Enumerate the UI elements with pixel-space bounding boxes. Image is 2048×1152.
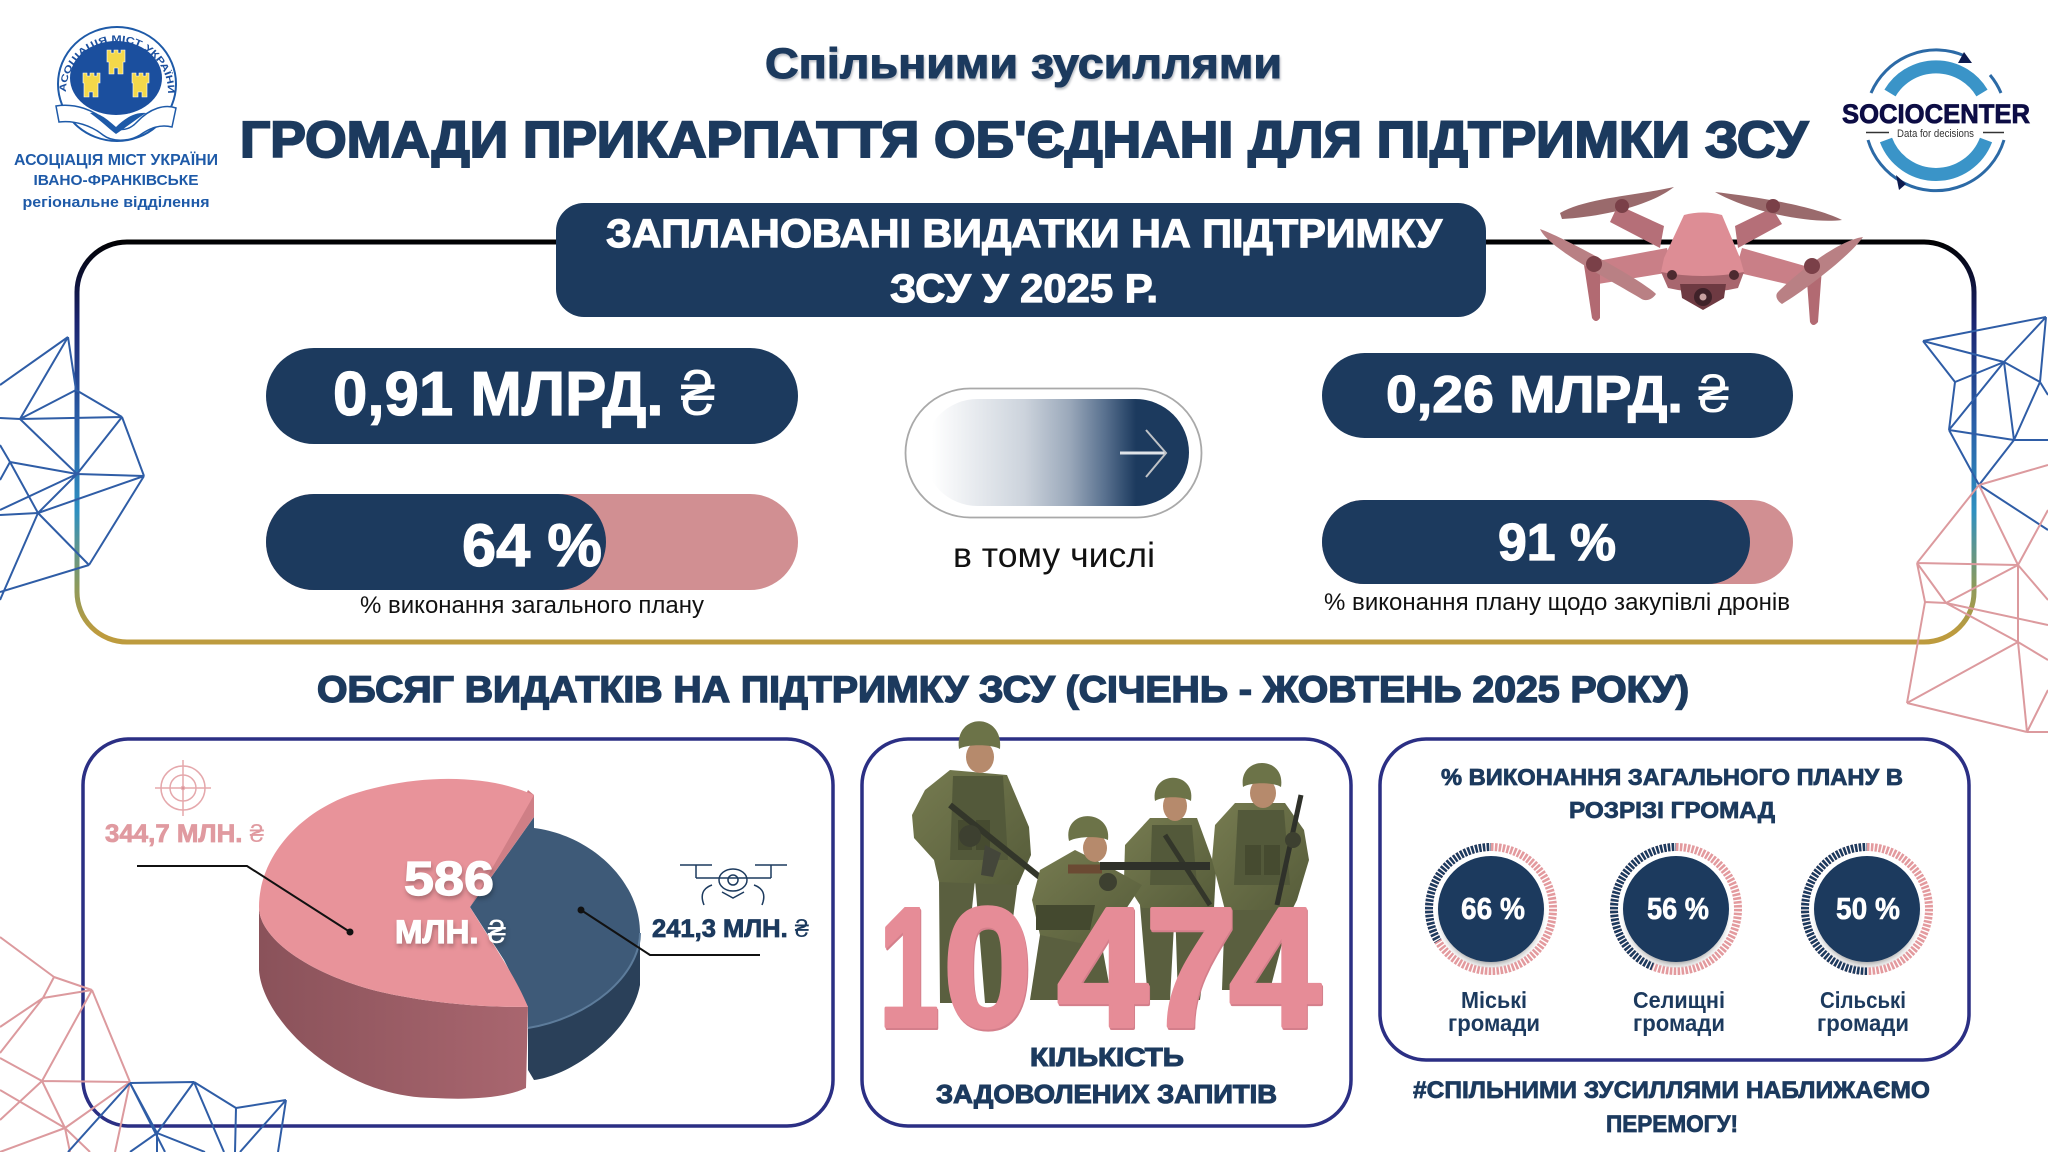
gauge: settlement 56 percent: 56 % (1647, 891, 1709, 926)
decoration: bottom-left pink mesh (0, 937, 130, 1152)
panel: planned expenses frame (77, 242, 1974, 642)
gauge labels: громади (1448, 1010, 1540, 1036)
main title: ГРОМАДИ ПРИКАРПАТТЯ ОБ'ЄДНАНІ ДЛЯ ПІДТРИМКИ ЗСУ (240, 111, 1809, 168)
text: including: в тому числі (953, 536, 1155, 575)
pie chart (259, 779, 640, 1099)
progress bar: 64 percent (266, 494, 798, 590)
big number: 10474 (879, 873, 1321, 1063)
label: drones: 241,3 МЛН. ₴ (652, 915, 809, 943)
caption: number of satisfied requests: КІЛЬКІСТЬ (1030, 1042, 1184, 1072)
big number: 10474: 4 (1229, 873, 1321, 1063)
gauge: urban 66 percent: 66 % (1461, 891, 1525, 926)
big number: 10474: 1 (879, 873, 939, 1063)
stat pill: total amount (266, 348, 798, 444)
closing slogan: ПЕРЕМОГУ! (1606, 1111, 1738, 1138)
gauge labels: Міські (1461, 987, 1527, 1013)
gauge labels (1448, 987, 1909, 1036)
section heading: ОБСЯГ ВИДАТКІВ НА ПІДТРИМКУ ЗСУ (СІЧЕНЬ - ЖОВТЕНЬ 2025 РОКУ) (317, 669, 1689, 710)
logo: Sociocenter (1842, 50, 2030, 191)
decoration: right blue mesh (1923, 317, 2048, 530)
logo caption (14, 152, 218, 211)
soldier 4 (1212, 763, 1309, 990)
gauge: urban 66 percent (1429, 847, 1553, 971)
stat pill: drones amount (1322, 353, 1793, 438)
label: other expenses: 344,7 МЛН. ₴ (105, 820, 264, 848)
illustration: soldiers (912, 721, 1309, 1003)
header: planned expenses: ЗСУ У 2025 Р. (890, 267, 1158, 311)
gauge labels: громади (1633, 1010, 1725, 1036)
progress bar: 64 percent: 64 % (462, 512, 602, 579)
gauge: rural 50 percent: 50 % (1836, 891, 1900, 926)
gauge labels: Сільські (1820, 987, 1906, 1013)
caption: number of satisfied requests: ЗАДОВОЛЕНИХ ЗАПИТІВ (936, 1079, 1277, 1109)
logo: Sociocenter: Data for decisions (1897, 128, 1974, 140)
progress bar: 91 percent (1322, 500, 1793, 584)
decoration: left blue mesh (0, 337, 144, 600)
leader line: other expenses (137, 866, 354, 936)
panel: plan execution by community (1380, 739, 1969, 1060)
closing slogan (1413, 1077, 1930, 1138)
closing slogan: #СПІЛЬНИМИ ЗУСИЛЛЯМИ НАБЛИЖАЄМО (1413, 1077, 1930, 1104)
header: planned expenses: ЗАПЛАНОВАНІ ВИДАТКИ НА ПІДТРИМКУ (606, 212, 1443, 256)
decoration: bottom-left blue mesh (68, 1082, 286, 1152)
progress bar: 91 percent: 91 % (1498, 514, 1616, 572)
pie total value (395, 853, 506, 950)
gauge labels: громади (1817, 1010, 1909, 1036)
logo caption: АСОЦІАЦІЯ МІСТ УКРАЇНИ (14, 152, 218, 169)
header: planned expenses (556, 203, 1486, 317)
subtitle: Спільними зусиллями (765, 40, 1282, 88)
icon: quadcopter (680, 865, 787, 905)
pie total value: 586 (404, 853, 494, 906)
leader line: drones (578, 906, 760, 955)
caption: number of satisfied requests (936, 1042, 1277, 1109)
logo: Sociocenter: SOCIOCENTER (1842, 99, 2030, 129)
caption: drones plan: % виконання плану щодо закупівлі дронів (1324, 589, 1790, 616)
icon: pink drone (1540, 187, 1863, 325)
logo caption: регіональне відділення (22, 194, 209, 211)
icon: target (155, 760, 211, 816)
big number: 10474: 7 (1145, 873, 1237, 1063)
gauge: rural 50 percent (1805, 847, 1929, 971)
gauge: settlement 56 percent (1614, 847, 1738, 971)
decoration: right pink mesh (1907, 465, 2048, 732)
logo: association of Ukrainian cities (55, 26, 177, 142)
pie total value: МЛН. ₴ (395, 914, 506, 950)
soldier 3 (1124, 778, 1216, 1000)
panel: pie chart (83, 739, 833, 1126)
stat pill: total amount: 0,91 МЛРД. ₴ (333, 360, 716, 429)
panel title: % ВИКОНАННЯ ЗАГАЛЬНОГО ПЛАНУ В (1441, 764, 1903, 790)
soldier 2 kneeling (1030, 816, 1210, 1000)
big number: 10474: 4 (1057, 873, 1148, 1063)
panel title (1441, 764, 1903, 823)
panel: satisfied requests (862, 721, 1351, 1126)
soldier 1 (912, 721, 1062, 1003)
gauge labels: Селищні (1633, 987, 1725, 1013)
logo: association of Ukrainian cities: АСОЦІАЦІЯ МІСТ УКРАЇНИ (60, 35, 174, 93)
big number: 10474: 0 (943, 873, 1032, 1063)
stat pill: drones amount: 0,26 МЛРД. ₴ (1386, 366, 1729, 424)
caption: total plan: % виконання загального плану (360, 592, 704, 619)
logo caption: ІВАНО-ФРАНКІВСЬКЕ (34, 172, 198, 189)
panel title: РОЗРІЗІ ГРОМАД (1569, 797, 1775, 823)
arrow pill: including (906, 388, 1202, 518)
